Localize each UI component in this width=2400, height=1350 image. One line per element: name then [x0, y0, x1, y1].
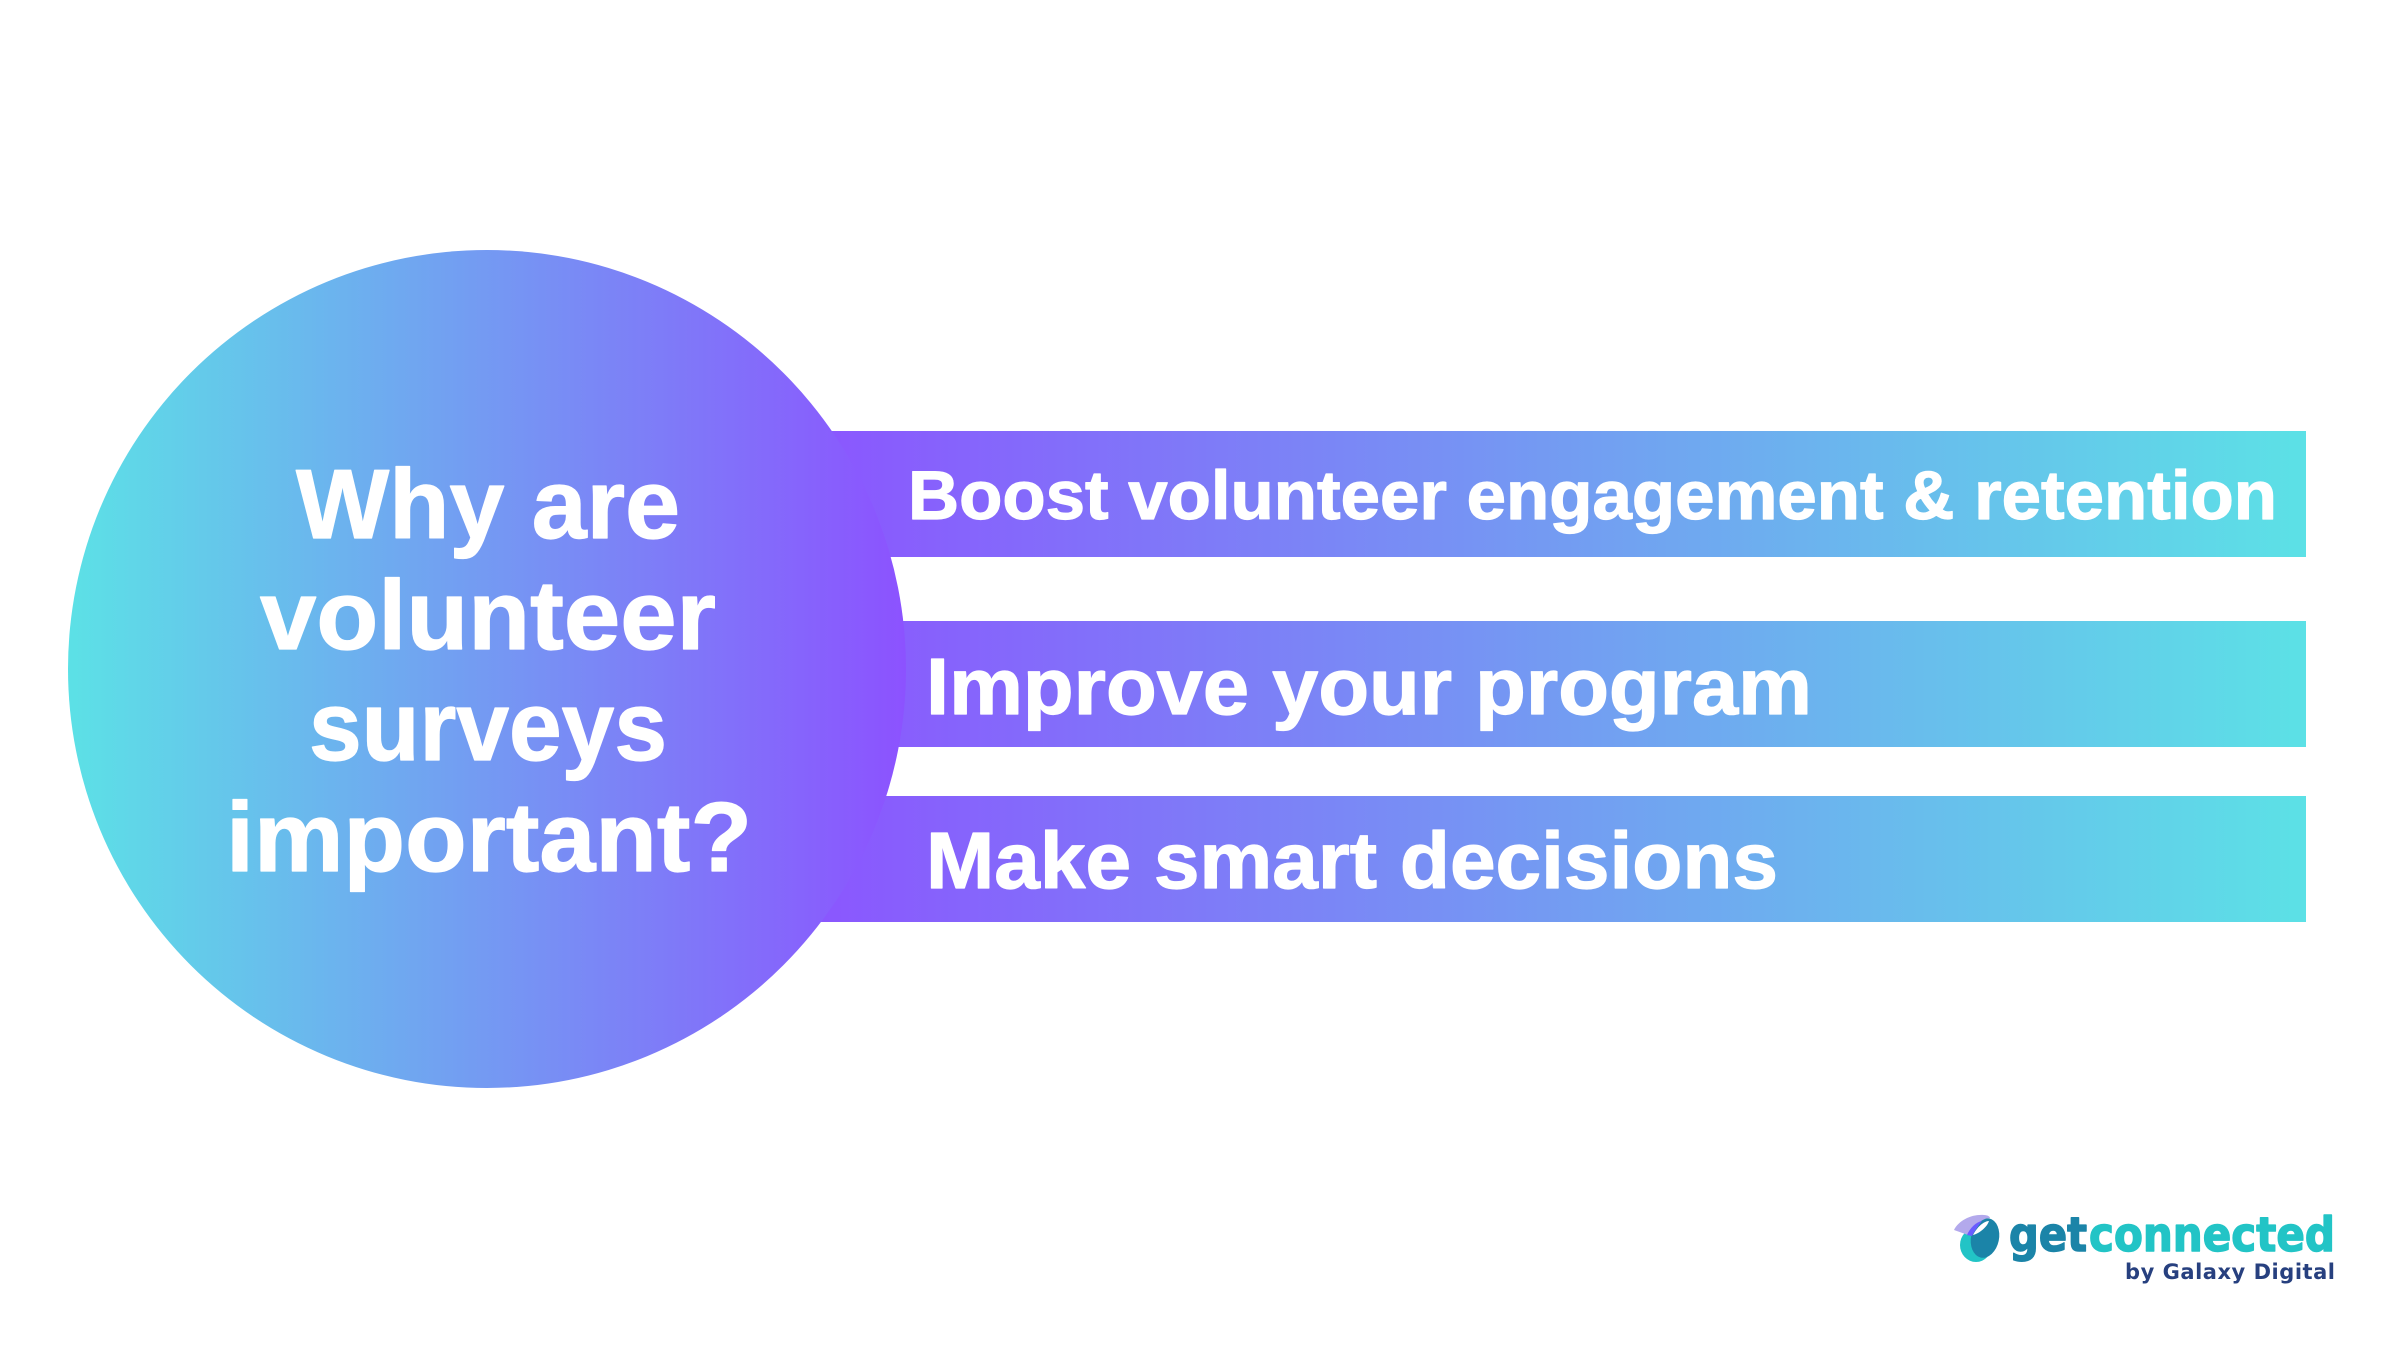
text: by Galaxy Digital: by Galaxy Digital — [2125, 1260, 2335, 1284]
text: connected: connected — [2089, 1208, 2335, 1263]
icon: logo mark — [1954, 1215, 2003, 1262]
heading: why are volunteer surveys important: volunteer — [260, 560, 716, 670]
heading: why are volunteer surveys important: important? — [226, 782, 752, 892]
panel: circle with question — [68, 250, 906, 1088]
heading: why are volunteer surveys important: Why are — [296, 449, 680, 559]
text: make smart decisions: Make smart decisions — [926, 816, 1778, 905]
panel: bar 2 — [770, 621, 2306, 747]
panel: bar 3 — [770, 796, 2306, 922]
text: get: get — [2009, 1208, 2087, 1263]
panel: bar 1 — [770, 431, 2306, 557]
heading: why are volunteer surveys important: surveys — [309, 671, 667, 781]
heading: why are volunteer surveys important — [226, 449, 752, 892]
text: improve your program: Improve your program — [926, 642, 1812, 731]
logo: getconnected by Galaxy Digital — [1954, 1208, 2335, 1284]
text: boost volunteer engagement and retention: Boost volunteer engagement & retention — [908, 457, 2277, 534]
